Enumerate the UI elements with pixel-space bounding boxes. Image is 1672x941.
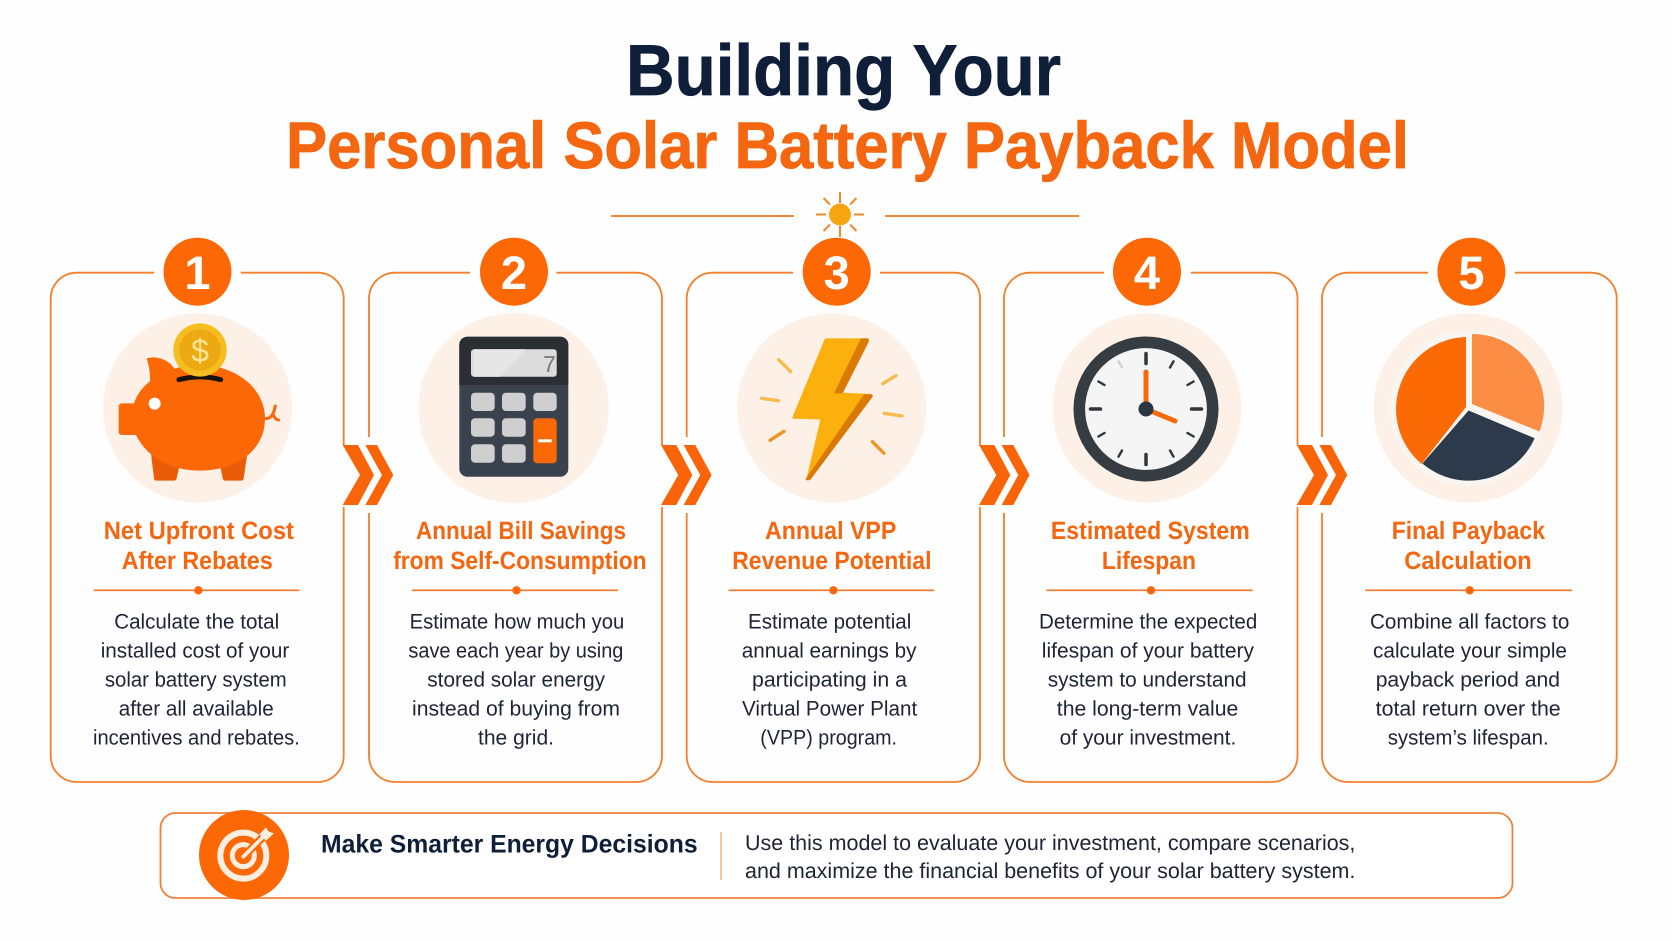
body text 4: of your investment. [1060,726,1236,749]
panel: step 3 annual VPP revenue [687,238,980,782]
rule 5 [1365,586,1572,594]
callout heading: Make Smarter Energy Decisions [321,830,698,858]
body text 1: installed cost of your [101,639,289,662]
title [286,31,1409,182]
card outline 2 [369,273,662,782]
number badge 4 [1113,238,1181,306]
number badge 2 [480,238,548,306]
body text 5: total return over the [1376,698,1561,720]
body text 3: Estimate potential [748,610,911,633]
icon: clock [1052,314,1242,502]
body text 1: after all available [119,698,274,720]
body text 3: participating in a [752,668,907,692]
callout text [745,831,1355,883]
heading 2 [393,517,647,575]
heading 1: After Rebates [122,547,273,575]
callout text: and maximize the financial benefits of your solar battery system. [745,859,1355,883]
body text 1 [93,610,300,749]
body text 2: stored solar energy [427,668,605,692]
arrow: step 3 to 4 [979,445,1030,505]
body text 4: lifespan of your battery [1042,639,1254,662]
rule 4 [1046,586,1253,594]
number badge 1: 1 [184,246,211,299]
body text 2 [408,610,624,749]
body text 2: save each year by using [408,639,623,662]
heading 3: Revenue Potential [732,547,932,575]
icon: target [199,810,289,900]
body text 3: Virtual Power Plant [742,698,917,720]
body text 1: incentives and rebates. [93,726,300,749]
number badge 3 [803,238,871,306]
icon: pie chart [1374,314,1562,502]
rule 2 [412,586,618,594]
body text 1: solar battery system [105,668,287,692]
arrow: step 2 to 3 [661,445,712,505]
card outline 3 [687,273,980,782]
panel: step 4 system lifespan [1004,238,1298,782]
body text 3: (VPP) program. [760,726,897,749]
body text 4 [1039,610,1257,749]
vertical divider [720,832,722,880]
arrow: step 1 to 2 [343,445,393,505]
callout outline [160,813,1512,898]
heading 2: Annual Bill Savings [416,517,626,545]
rule 3 [729,586,934,594]
number badge 5 [1437,238,1505,306]
panel: step 2 annual bill savings [369,238,662,782]
panel: step 1 net upfront cost [51,238,344,782]
body text 3 [742,610,917,749]
body text 2: instead of buying from [412,698,620,720]
body text 4: Determine the expected [1039,610,1257,633]
rule 1 [94,586,299,594]
icon: calculator [419,313,609,503]
icon: piggy bank: $ [191,333,209,368]
heading 3 [732,517,932,575]
body text 5: Combine all factors to [1370,610,1569,633]
heading 5 [1392,517,1545,575]
heading 3: Annual VPP [765,517,896,545]
panel: step 5 final payback [1322,238,1617,782]
body text 3: annual earnings by [742,639,917,662]
heading 1: Net Upfront Cost [104,517,295,545]
callout text: Use this model to evaluate your investment, compare scenarios, [745,831,1355,855]
heading 2: from Self-Consumption [393,547,647,575]
title line 2: Personal Solar Battery Payback Model [286,108,1409,182]
heading 5: Calculation [1404,547,1532,575]
card outline 1 [51,273,344,782]
icon: piggy bank [103,314,292,502]
heading 4: Lifespan [1102,547,1196,575]
number badge 2: 2 [501,246,527,299]
body text 4: system to understand [1048,668,1247,692]
panel: bottom callout [160,810,1512,900]
body text 2: Estimate how much you [410,610,624,633]
body text 5 [1370,610,1569,749]
body text 5: system’s lifespan. [1388,726,1549,749]
heading 1 [104,517,295,575]
number badge 3: 3 [824,246,850,299]
body text 1: Calculate the total [114,610,279,633]
heading 4 [1051,517,1250,575]
title line 1: Building Your [626,31,1061,111]
sun divider [611,192,1079,237]
heading 4: Estimated System [1051,517,1250,545]
body text 5: calculate your simple [1373,639,1567,662]
icon: lightning bolt [737,314,926,502]
heading 5: Final Payback [1392,517,1545,545]
card outline 5 [1322,273,1617,782]
icon: calculator: 7 [543,351,556,377]
card outline 4 [1004,273,1298,782]
number badge 4: 4 [1134,246,1160,299]
number badge 5: 5 [1458,246,1484,299]
body text 5: payback period and [1376,668,1560,692]
body text 4: the long-term value [1057,698,1238,720]
number badge 1 [164,238,232,306]
arrow: step 4 to 5 [1297,445,1347,505]
body text 2: the grid. [478,726,554,749]
